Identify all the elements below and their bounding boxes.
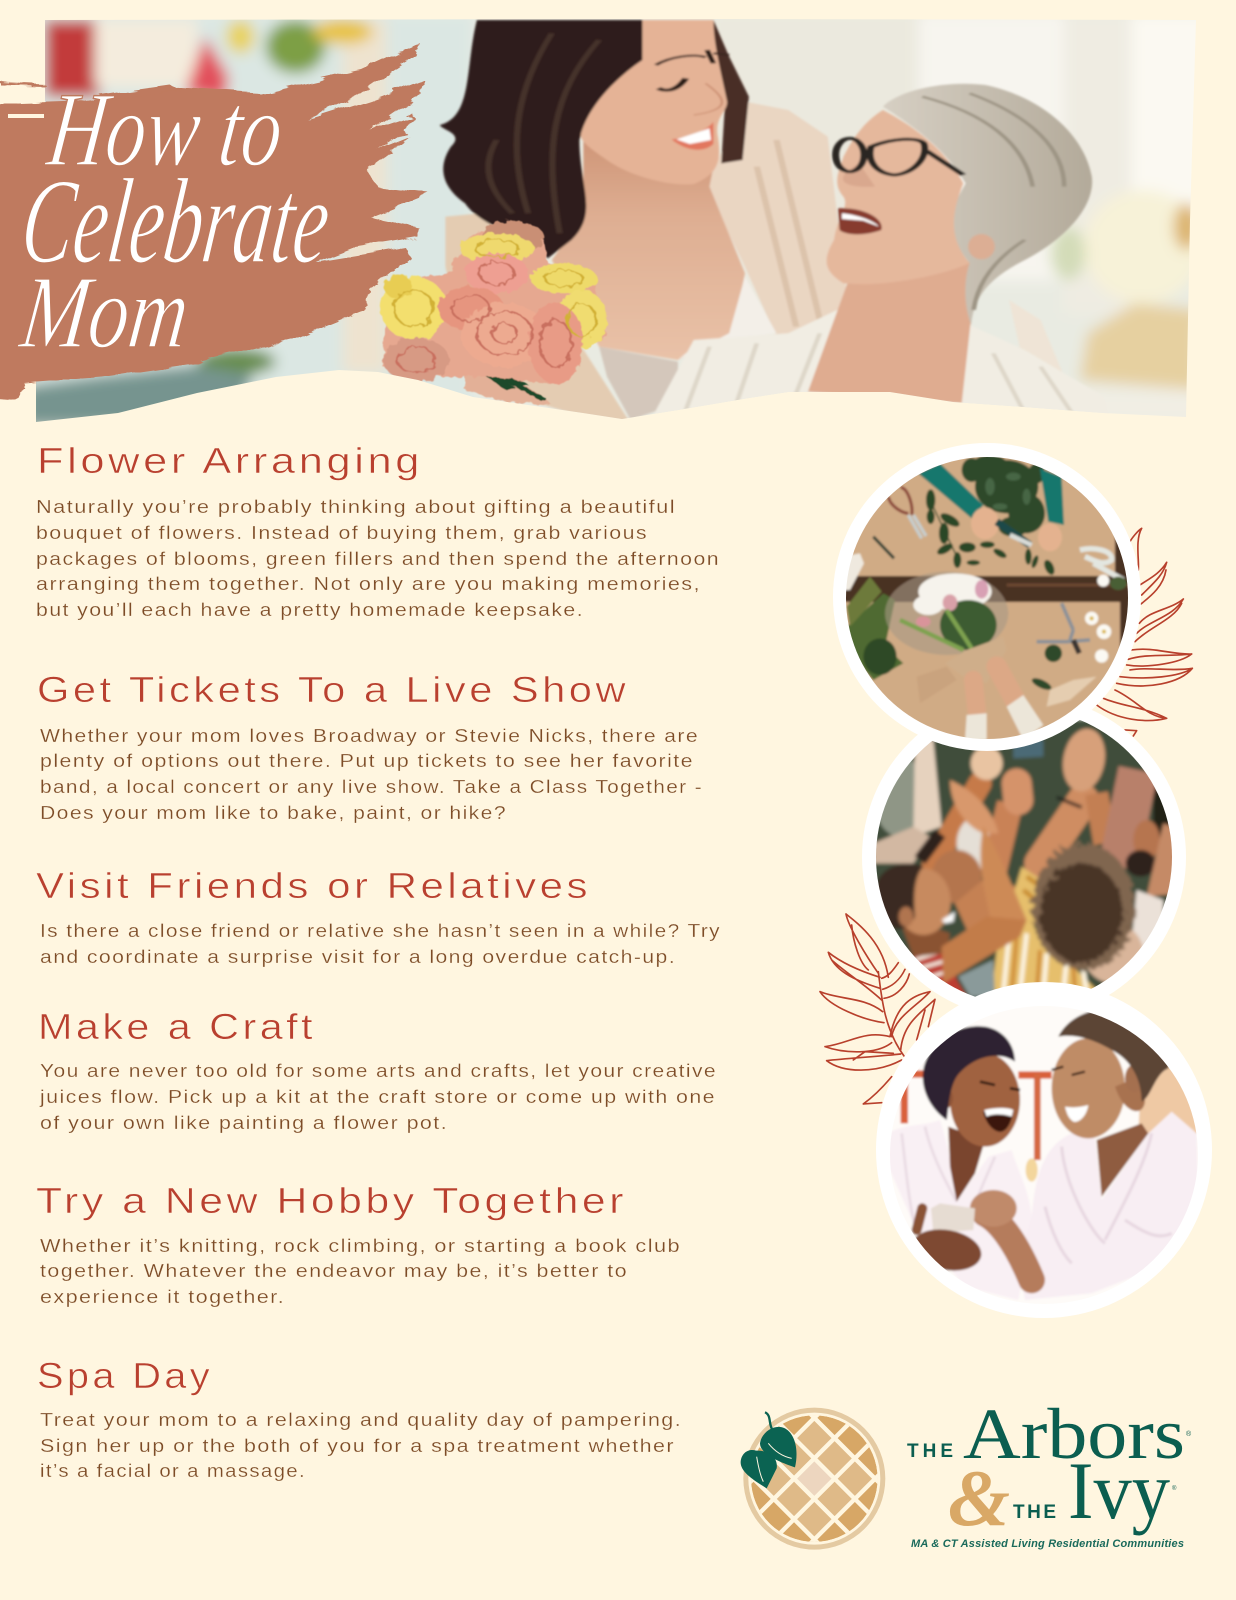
body text: together. Whatever the endeavor may be, it’s better to [40,1261,628,1281]
logo wordmark: The Arbors & the Ivy: ® [1186,1430,1192,1438]
logo wordmark: The Arbors & the Ivy: Arbors [963,1394,1185,1474]
body text [40,921,721,967]
body text: Whether your mom loves Broadway or Stevie Nicks, there are [40,726,699,746]
section: Try a New Hobby Together [36,1180,681,1307]
logo: lattice pie emblem [740,1408,886,1550]
young woman's face [581,20,727,184]
section: Flower Arranging [36,440,720,620]
section: Get Tickets To a Live Show [37,669,703,823]
section: Spa Day [37,1355,682,1481]
glasses [836,138,963,175]
section: Make a Craft [38,1006,717,1133]
body text: but you’ll each have a pretty homemade keepsake. [36,600,584,620]
foliage pile [962,455,1045,537]
body text: Does your mom like to bake, paint, or hike? [40,803,507,823]
brush stroke banner [0,43,429,400]
heading: Spa Day [37,1355,213,1396]
logo wordmark: The Arbors & the Ivy: THE [907,1441,953,1462]
body text: Is there a close friend or relative she hasn’t seen in a while? Try [40,921,721,941]
mother's face [827,110,970,284]
body text [36,497,720,620]
heading: Try a New Hobby Together [36,1180,627,1221]
logo wordmark: The Arbors & the Ivy: & [948,1455,1010,1543]
mother's neck [808,260,977,403]
logo wordmark: The Arbors & the Ivy: Ivy [1068,1445,1170,1536]
far side hair [713,20,749,163]
body text: band, a local concert or any live show. Take a Class Together - [40,777,703,797]
heading: Make a Craft [38,1006,316,1047]
bouquet of carnations [381,221,607,405]
chest [552,140,745,360]
ivy leaves [741,1412,797,1488]
photo ring: friends clapping [862,695,1186,1019]
body text: it’s a facial or a massage. [40,1461,306,1481]
logo tagline: MA & CT Assisted Living Residential Communities [911,1538,1184,1550]
photo ring: flower arranging [833,443,1141,751]
title: How to Celebrate Mom: Celebrate [15,154,337,289]
young woman's hair [440,20,642,258]
photo ring: women in spa robes [876,982,1212,1318]
body text [40,726,703,823]
body text [40,1236,681,1307]
body text: Treat your mom to a relaxing and quality day of pampering. [40,1410,682,1430]
header photo: daughter and mother with bouquet [36,19,1196,422]
body text: You are never too old for some arts and crafts, let your creative [40,1061,717,1081]
body text: Sign her up or the both of you for a spa treatment whether [40,1436,675,1456]
body text: and coordinate a surprise visit for a long overdue catch-up. [40,947,676,967]
body text: packages of blooms, green fillers and then spend the afternoon [36,549,720,569]
body text: of your own like painting a flower pot. [40,1113,448,1133]
woman's far shoulder [445,213,631,423]
mother's jacket [656,310,1067,413]
title: How to Celebrate Mom: How to [41,71,289,189]
body text: Whether it’s knitting, rock climbing, or starting a book club [40,1236,681,1256]
heading: Get Tickets To a Live Show [37,669,629,710]
heading: Visit Friends or Relatives [36,865,591,906]
title: How to Celebrate Mom: Mom [14,254,195,370]
logo wordmark: The Arbors & the Ivy: ® [1172,1485,1177,1492]
photo: women laughing in spa robes [890,1012,1198,1300]
logo wordmark: The Arbors & the Ivy [907,1394,1192,1543]
cardigan [706,102,859,337]
body text: bouquet of flowers. Instead of buying them, grab various [36,523,648,543]
body text: juices flow. Pick up a kit at the craft store or come up with one [39,1087,716,1107]
body text [39,1061,717,1133]
title: How to Celebrate Mom [14,71,337,370]
body text: plenty of options out there. Put up tickets to see her favorite [40,751,694,771]
body text: arranging them together. Not only are you making memories, [36,574,701,594]
mother's hair [883,84,1092,325]
decorative leaf: upper right [1097,528,1192,736]
body text: Naturally you’re probably thinking about gifting a beautiful [36,497,676,517]
photo: flower arranging table [846,457,1128,739]
body text [40,1410,682,1481]
body text: experience it together. [40,1287,285,1307]
section: Visit Friends or Relatives [36,865,721,967]
photo: friends clapping at concert [870,720,1180,1010]
heading: Flower Arranging [37,440,423,481]
logo wordmark: The Arbors & the Ivy: THE [1013,1502,1056,1523]
decorative leaf: lower left [820,914,935,1104]
